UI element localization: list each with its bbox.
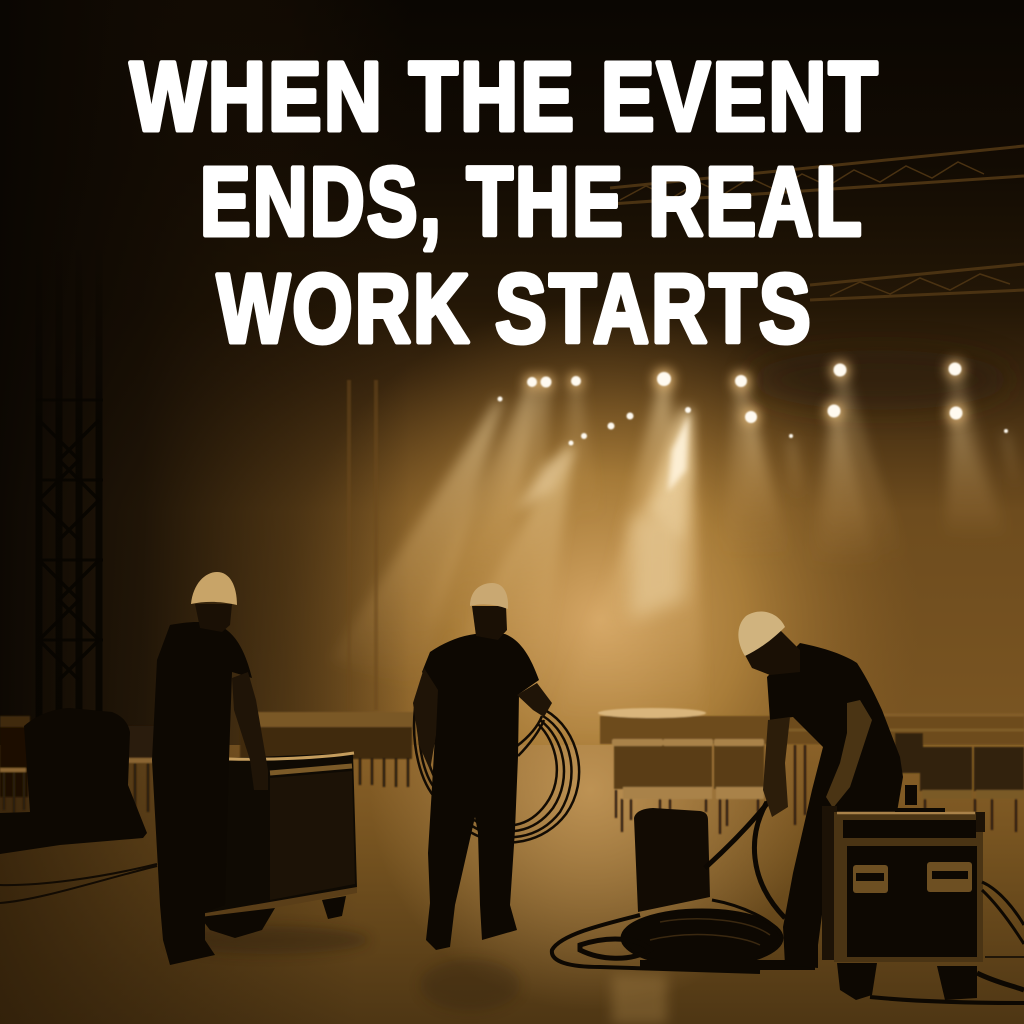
cables right edge: [870, 882, 1024, 1003]
case label right: [927, 862, 972, 892]
case label left: [853, 865, 888, 893]
title line 3: WORK STARTS: [217, 254, 813, 363]
head: [472, 606, 507, 640]
stage lights: [498, 360, 1008, 446]
speaker: [634, 800, 785, 918]
worker centre: [413, 583, 552, 950]
floor: [0, 745, 1024, 1024]
light beams: [330, 372, 1022, 740]
truss towers: [36, 250, 376, 720]
round table and seating rows right: [598, 708, 1024, 834]
cable pile: [552, 900, 815, 972]
title line 1: WHEN THE EVENT: [130, 42, 880, 151]
flight case right: [822, 785, 985, 1000]
hard hat: [470, 583, 508, 609]
roof truss rigging: [610, 146, 1024, 300]
seating rows left: [0, 712, 415, 815]
worker right: [738, 612, 903, 968]
coiled cable: [414, 708, 579, 842]
hard hat: [738, 612, 785, 656]
head: [195, 604, 232, 632]
black base block by tower: [0, 708, 147, 854]
flight case left: [190, 753, 357, 938]
hard hat: [191, 572, 237, 605]
bright core of main beam: [515, 412, 690, 620]
title: [130, 42, 880, 363]
worker left: [152, 572, 268, 965]
floor cables left: [0, 864, 157, 903]
head: [745, 630, 800, 675]
